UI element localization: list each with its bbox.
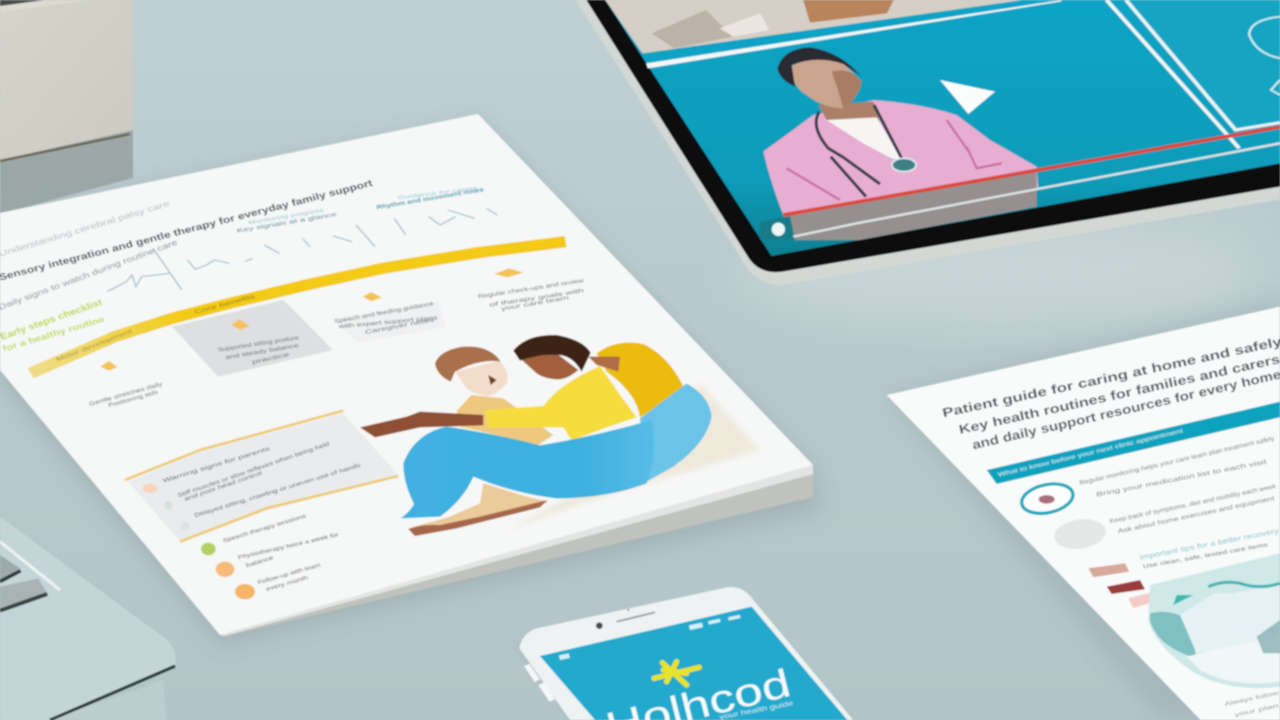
laptop lower shell <box>50 680 167 720</box>
teal banner: What to know before your next clinic appointment <box>997 428 1184 479</box>
blue trousers <box>401 420 654 518</box>
tablet rim <box>575 0 1280 285</box>
coat folds <box>787 120 1002 200</box>
clinic illustration <box>1148 553 1280 688</box>
play triangle <box>940 80 995 114</box>
doctor shirt <box>827 117 902 160</box>
video thumbnail strip <box>605 0 1061 68</box>
doctor face shadow <box>832 70 862 108</box>
yellow band <box>31 242 566 373</box>
yellow band: Motor development <box>55 328 134 363</box>
list text: balance <box>245 555 274 569</box>
brochure upper content <box>0 178 585 409</box>
brochure <box>0 114 813 636</box>
teal caption two: Guidance for carers <box>397 186 478 201</box>
green callout text: Early steps checklist <box>0 297 105 343</box>
leaflet sheet <box>887 307 1280 720</box>
tablet bezel <box>586 0 1280 272</box>
doctor face <box>790 59 862 108</box>
green callout text: for a healthy routine <box>1 314 106 353</box>
brochure page edge <box>218 465 813 636</box>
brochure lower panel <box>125 411 398 599</box>
benefit text blocks: with expert support plans <box>337 315 438 330</box>
laptop front edge <box>50 666 175 720</box>
phone camera and speaker <box>596 609 655 629</box>
tablet <box>575 0 1280 285</box>
list text: Stiff muscles or slow reflexes when being held <box>177 441 330 499</box>
laptop bottom left <box>0 517 176 720</box>
teal caption two: Rhythm and movement notes <box>376 187 485 211</box>
tablet frame and screen <box>575 0 1280 285</box>
playback reflection <box>783 168 1037 240</box>
right leaflet shadow <box>885 300 1280 720</box>
storage box top left <box>0 0 133 214</box>
caregiver gold back <box>597 342 685 417</box>
faint heading line: Understanding cerebral palsy care <box>0 199 171 258</box>
ECG trace <box>107 208 498 292</box>
leaflet body text: Keep track of symptoms, diet and mobility each week <box>1109 483 1278 525</box>
list text: Speech therapy sessions <box>222 513 307 545</box>
leaflet heading: Key health routines for families and carers <box>958 352 1280 437</box>
teal caption one: Key signals at a glance <box>236 211 338 234</box>
benefit text blocks: and steady balance <box>225 342 300 361</box>
tablet screen <box>605 0 1280 256</box>
benefit text blocks: Caregiver notes <box>364 317 435 336</box>
leaflet heading: Patient guide for caring at home and safely <box>941 334 1280 420</box>
doctor and player <box>760 47 1280 240</box>
leaflet body text: Bring your medication list to each visit <box>1096 459 1268 499</box>
benefit text blocks <box>88 277 585 409</box>
list markers <box>143 484 255 599</box>
lower control band <box>760 216 795 240</box>
child head <box>435 347 507 396</box>
grey circle icon <box>1052 516 1108 552</box>
caregiver yellow top <box>485 366 637 441</box>
list text: Follow-up with team <box>257 562 322 586</box>
right leaflet <box>887 307 1280 720</box>
doctor neck <box>818 102 882 137</box>
phone side buttons <box>524 664 555 702</box>
phone screen <box>540 607 847 720</box>
list text: Delayed sitting, crawling or uneven use of hands <box>194 463 362 519</box>
list text: every month <box>266 575 309 593</box>
dark heading line: Sensory integration and gentle therapy for everyday family support <box>0 178 375 283</box>
benefit text blocks: your care team <box>500 295 569 312</box>
brochure shadow <box>0 120 820 645</box>
child body <box>457 395 553 446</box>
icon: medical outline <box>1249 17 1280 95</box>
benefit text blocks: Regular check-ups and review <box>477 277 585 300</box>
leaflet caption: your plan <box>1234 703 1279 719</box>
benefit text blocks: Speech and feeding guidance <box>334 300 435 325</box>
teal caption one <box>236 208 338 234</box>
phone <box>517 587 853 720</box>
leaflet body text: Regular monitoring helps your care team plan treatment safely <box>1079 435 1276 487</box>
progress bar <box>783 127 1280 215</box>
benefit markers <box>100 268 524 371</box>
doctor hair <box>777 47 861 87</box>
laptop keys <box>0 555 47 611</box>
illustration backdrop <box>507 383 760 530</box>
phone body <box>519 587 853 720</box>
caregiver head <box>513 335 591 379</box>
ring icon <box>1019 480 1076 518</box>
leaflet caption: Always follow <box>1224 690 1280 708</box>
progress rail <box>793 143 1280 237</box>
benefit text blocks: Gentle stretches daily <box>88 381 165 408</box>
list text: Warning signs for parents <box>162 446 271 485</box>
phone shadow <box>517 593 853 720</box>
benefit text blocks: practice <box>251 351 291 366</box>
benefit text blocks: of therapy goals with <box>489 288 584 308</box>
second video panel <box>1107 0 1280 148</box>
blue cushion <box>640 383 712 482</box>
leaflet heading <box>941 334 1280 452</box>
caregiver hand <box>588 357 620 372</box>
leaflet body text: Ask about home exercises and equipment <box>1117 495 1276 535</box>
child lower body <box>408 483 548 536</box>
leaflet subheading: Important tips for a better recovery <box>1139 526 1280 562</box>
benefit text blocks: Positioning aids <box>107 389 159 409</box>
grey feature card <box>172 300 333 377</box>
laptop key highlight <box>0 542 60 590</box>
yellow band: Core benefits <box>194 293 256 316</box>
light subheading line: Daily signs to watch during routine care <box>0 238 180 312</box>
app logo <box>654 662 699 685</box>
status icons <box>559 615 741 660</box>
gold rules <box>125 411 398 542</box>
list text: Physiotherapy twice a week for <box>237 532 340 561</box>
thumbnail images <box>1088 563 1182 615</box>
laptop palm rest <box>0 517 176 720</box>
leaflet heading: and daily support resources for every home <box>971 367 1280 452</box>
list text: and poor head control <box>184 471 263 503</box>
leaflet caption <box>1224 690 1280 719</box>
illustration: caregiver and child <box>360 335 760 536</box>
stethoscope <box>816 105 916 197</box>
teal caption one: Monitoring progress <box>248 208 325 226</box>
leaflet subheading: Use clean, safe, tested care items <box>1143 542 1269 570</box>
clasped arms <box>360 412 483 437</box>
doctor coat <box>763 100 1038 215</box>
small card outline <box>333 302 446 343</box>
lower panel background <box>128 413 398 542</box>
list text <box>162 441 362 593</box>
player control <box>772 223 785 236</box>
teal banner <box>987 402 1280 484</box>
leaflet subheading <box>1139 526 1280 570</box>
leaflet body text <box>1079 435 1278 535</box>
benefit text blocks: Supported sitting posture <box>217 335 300 353</box>
